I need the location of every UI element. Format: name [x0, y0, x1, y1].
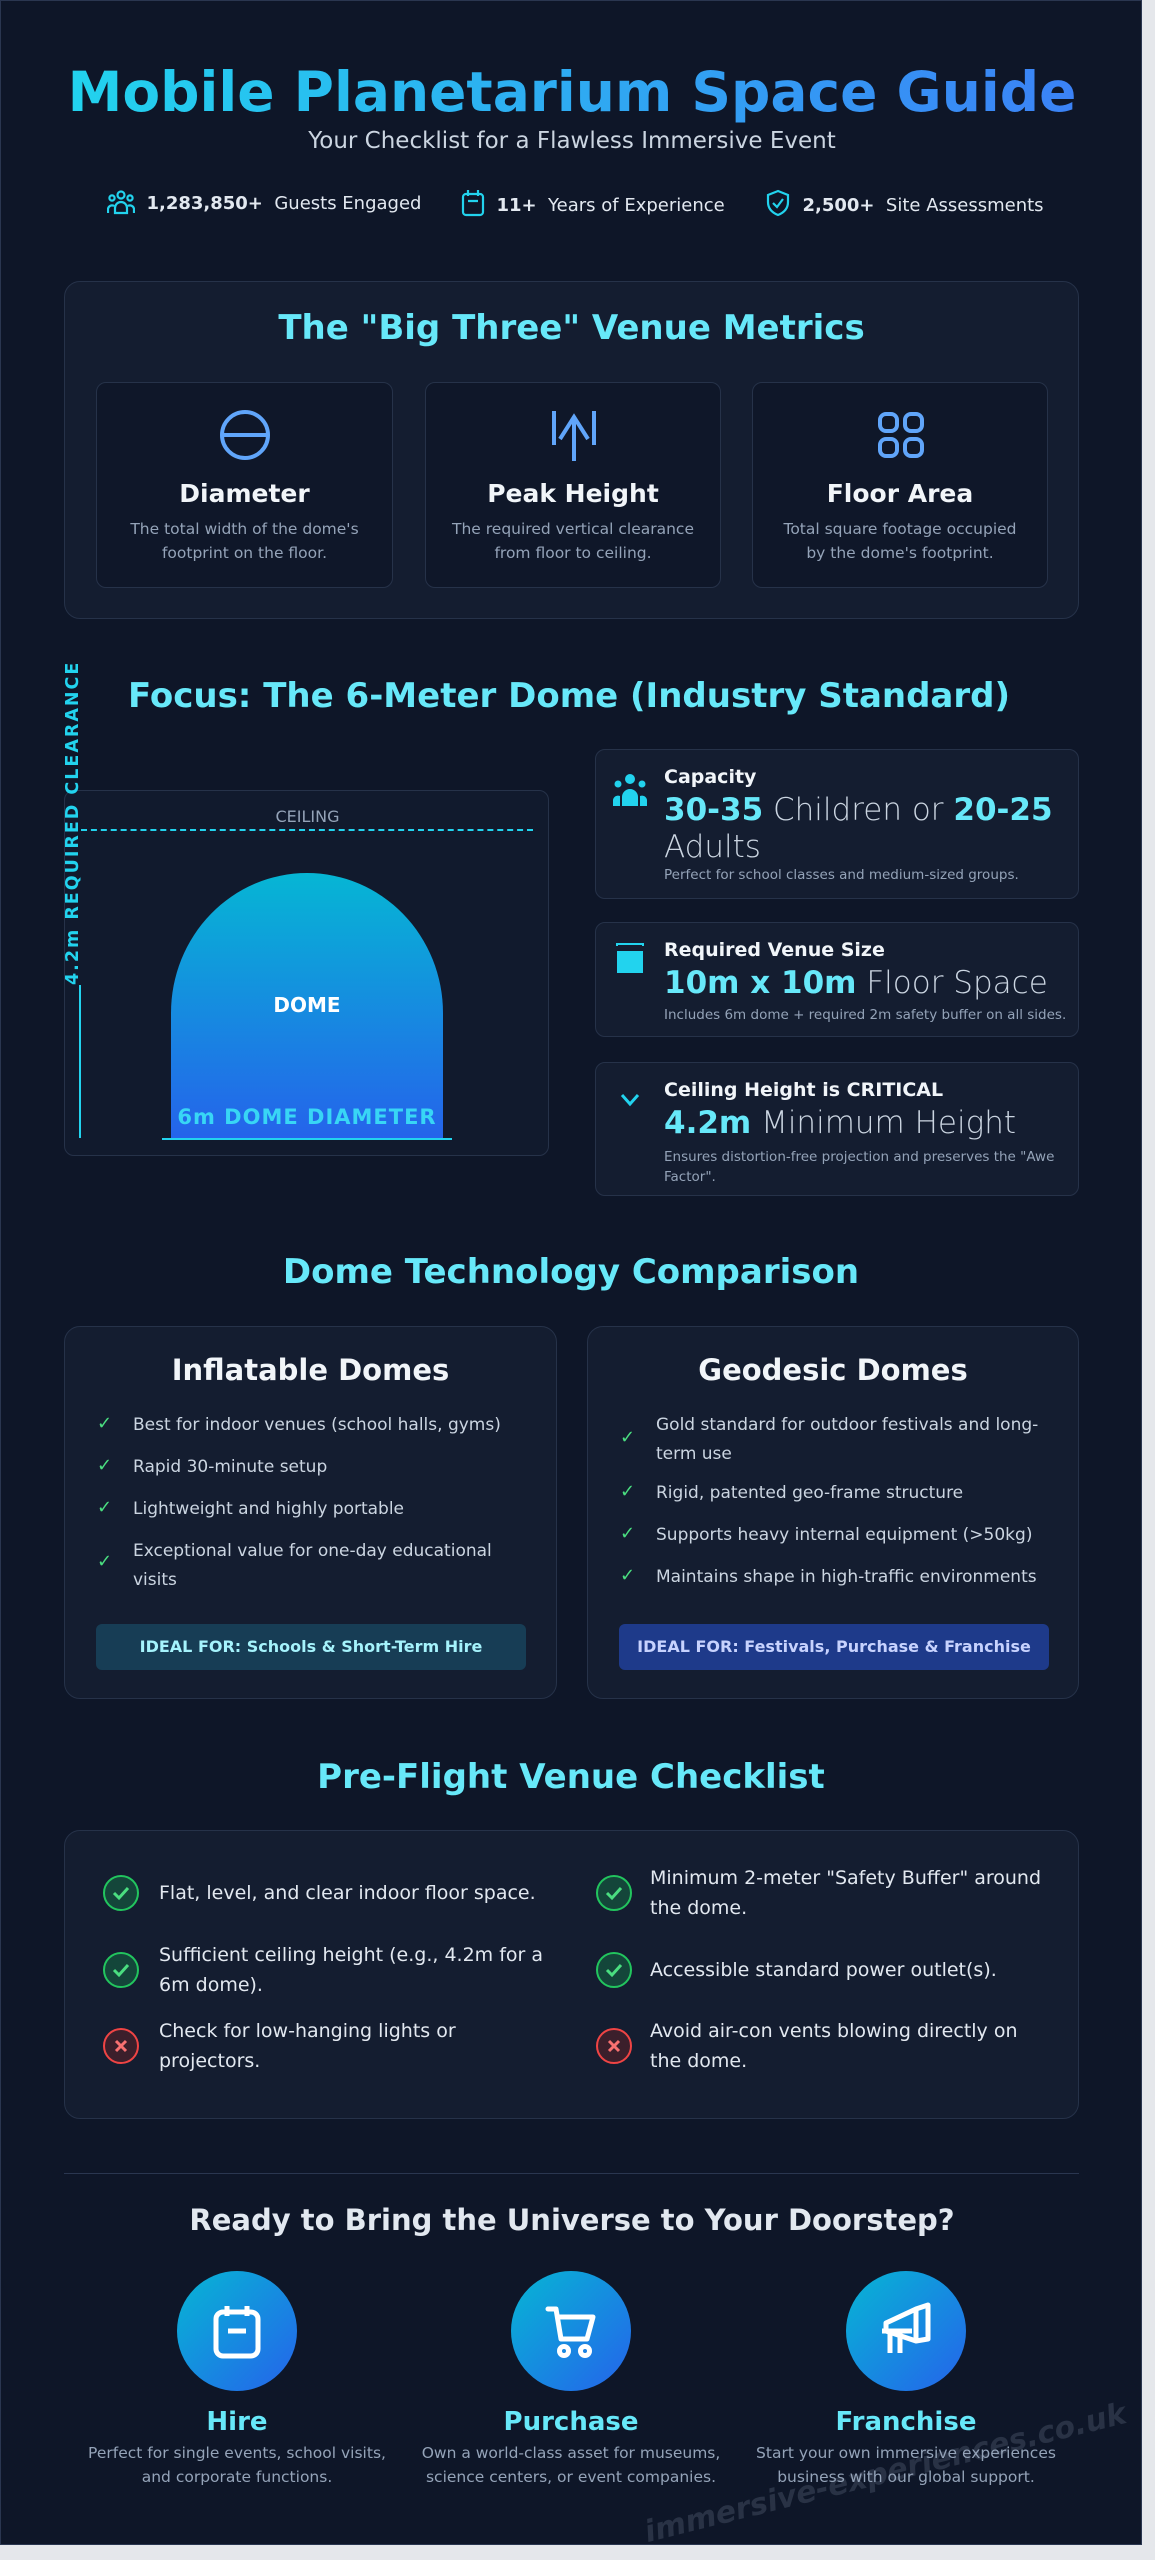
card: diameter: footprint on the floor. — [162, 544, 327, 562]
list: geodesic features: Supports heavy internal equipment (>50kg) — [656, 1525, 1032, 1545]
item: ceiling: Sufficient ceiling height (e.g., 4.2m for a 6m dome). — [159, 1944, 543, 1996]
panel: geodesic domes: Geodesic Domes — [698, 1353, 968, 1387]
heading: call to action: Ready to Bring the Universe to Your Doorstep? — [189, 2203, 955, 2237]
list: inflatable features — [97, 1413, 501, 1590]
icon: cart — [511, 2271, 631, 2391]
badge: ideal for schools: IDEAL FOR: Schools & Short-Term Hire — [140, 1637, 482, 1656]
list: geodesic features: ✓ — [620, 1427, 635, 1448]
dome shape: 6m DOME DIAMETER — [177, 1105, 437, 1129]
icon: peak height — [552, 411, 596, 461]
stat: assessments — [766, 190, 1044, 216]
option: purchase: Purchase — [504, 2407, 638, 2437]
item: lights: Check for low-hanging lights or projectors. — [159, 2020, 456, 2072]
list: geodesic features: ✓ — [620, 1565, 635, 1586]
card: venue size — [595, 922, 1079, 1037]
card: venue size: 10m x 10m Floor Space — [664, 965, 1048, 1001]
panel: inflatable domes — [64, 1326, 557, 1699]
option: hire: Hire — [206, 2407, 268, 2437]
card: capacity: 30-35 Children or 20-25 Adults — [664, 792, 1053, 865]
panel: dome diagram — [64, 790, 549, 1156]
heading: focus: Focus: The 6-Meter Dome (Industry Standard) — [128, 676, 1010, 716]
icon: megaphone — [846, 2271, 966, 2391]
heading: checklist: Pre-Flight Venue Checklist — [317, 1757, 825, 1797]
option: franchise: business with our global support. — [777, 2468, 1035, 2486]
card: ceiling height: Ensures distortion-free projection and preserves the "Awe Factor". — [664, 1149, 1054, 1185]
watermark: immersive-experiences.co.uk — [641, 2396, 1130, 2550]
panel: big three metrics — [64, 281, 1079, 619]
list: inflatable features: ✓ — [97, 1455, 112, 1476]
stat: guests: 1,283,850+ Guests Engaged — [146, 193, 421, 214]
option: franchise: Start your own immersive experiences — [756, 2444, 1056, 2462]
list: geodesic features: ✓ — [620, 1523, 635, 1544]
list: inflatable features: Best for indoor venues (school halls, gyms) — [133, 1415, 501, 1435]
card: ceiling height: 4.2m Minimum Height — [664, 1105, 1016, 1141]
option: hire: Perfect for single events, school visits, — [88, 2444, 386, 2462]
option: hire: and corporate functions. — [142, 2468, 332, 2486]
panel: checklist — [64, 1830, 1079, 2119]
card: floor area — [752, 382, 1048, 588]
panel: geodesic domes — [587, 1326, 1079, 1699]
heading: dome comparison: Dome Technology Comparison — [283, 1252, 859, 1292]
vertical label: required clearance: 4.2m REQUIRED CLEARANCE — [63, 660, 83, 985]
card: floor area: Floor Area — [827, 479, 973, 508]
card: floor area: by the dome's footprint. — [806, 544, 994, 562]
icon: people — [613, 774, 647, 806]
dome shape: DOME — [273, 993, 341, 1017]
card: peak height: from floor to ceiling. — [494, 544, 652, 562]
list: geodesic features: Gold standard for outdoor festivals and long-term use — [656, 1415, 1038, 1464]
icon: venue — [616, 943, 644, 973]
stat: years: 11+ Years of Experience — [496, 195, 725, 216]
card: peak height: Peak Height — [487, 479, 659, 508]
list: geodesic features: Maintains shape in high-traffic environments — [656, 1567, 1037, 1587]
panel: inflatable domes: Inflatable Domes — [172, 1353, 449, 1387]
option: franchise: Franchise — [836, 2407, 976, 2437]
stats row — [107, 190, 1044, 216]
card: floor area: Total square footage occupied — [783, 520, 1017, 538]
card: capacity: Capacity — [664, 766, 756, 788]
icon: diameter — [220, 410, 270, 460]
stat: assessments: 2,500+ Site Assessments — [802, 195, 1044, 216]
card: ceiling height: Ceiling Height is CRITICAL — [664, 1079, 943, 1101]
card: venue size: Required Venue Size — [664, 939, 885, 961]
card: peak height — [425, 382, 721, 588]
card: diameter — [96, 382, 393, 588]
clearance line — [79, 985, 81, 1138]
option: purchase: science centers, or event companies. — [426, 2468, 716, 2486]
ceiling label: CEILING — [276, 807, 340, 826]
item: power — [596, 1952, 997, 1988]
item: air-con: Avoid air-con vents blowing directly on the dome. — [650, 2020, 1018, 2072]
badge: ideal for schools — [96, 1624, 526, 1670]
badge: ideal for festivals: IDEAL FOR: Festivals, Purchase & Franchise — [637, 1637, 1031, 1656]
card: peak height: The required vertical clearance — [452, 520, 694, 538]
list: geodesic features: Rigid, patented geo-frame structure — [656, 1483, 963, 1503]
dome shape — [171, 873, 443, 1139]
list: inflatable features: Lightweight and highly portable — [133, 1499, 404, 1519]
heading: The "Big Three" Venue Metrics — [278, 308, 865, 348]
item: floor: Flat, level, and clear indoor floor space. — [159, 1882, 536, 1904]
list: geodesic features — [620, 1415, 1038, 1587]
stat: years — [462, 190, 725, 216]
list: inflatable features: ✓ — [97, 1551, 112, 1572]
card: diameter: Diameter — [179, 479, 310, 508]
card: capacity — [595, 749, 1079, 899]
option: purchase: Own a world-class asset for museums, — [422, 2444, 720, 2462]
item: safety buffer: Minimum 2-meter "Safety Buffer" around the dome. — [650, 1867, 1041, 1919]
title: Mobile Planetarium Space Guide — [68, 60, 1076, 124]
item: power: Accessible standard power outlet(s). — [650, 1959, 997, 1981]
list: inflatable features: Rapid 30-minute setup — [133, 1457, 327, 1477]
option: hire — [88, 2271, 386, 2486]
icon: calendar — [177, 2271, 297, 2391]
option: franchise — [756, 2271, 1056, 2486]
list: inflatable features: Exceptional value for one-day educational visits — [133, 1541, 492, 1590]
list: geodesic features: ✓ — [620, 1481, 635, 1502]
card: diameter: The total width of the dome's — [130, 520, 359, 538]
badge: ideal for festivals — [619, 1624, 1049, 1670]
card: venue size: Includes 6m dome + required 2m safety buffer on all sides. — [664, 1007, 1066, 1023]
subtitle: Your Checklist for a Flawless Immersive Event — [308, 128, 836, 154]
option: purchase — [422, 2271, 720, 2486]
card: ceiling height — [595, 1062, 1079, 1196]
list: inflatable features: ✓ — [97, 1497, 112, 1518]
icon: floor area — [878, 412, 924, 458]
icon: chevron — [621, 1094, 639, 1106]
card: capacity: Perfect for school classes and medium-sized groups. — [664, 867, 1019, 883]
item: floor — [103, 1875, 536, 1911]
list: inflatable features: ✓ — [97, 1413, 112, 1434]
